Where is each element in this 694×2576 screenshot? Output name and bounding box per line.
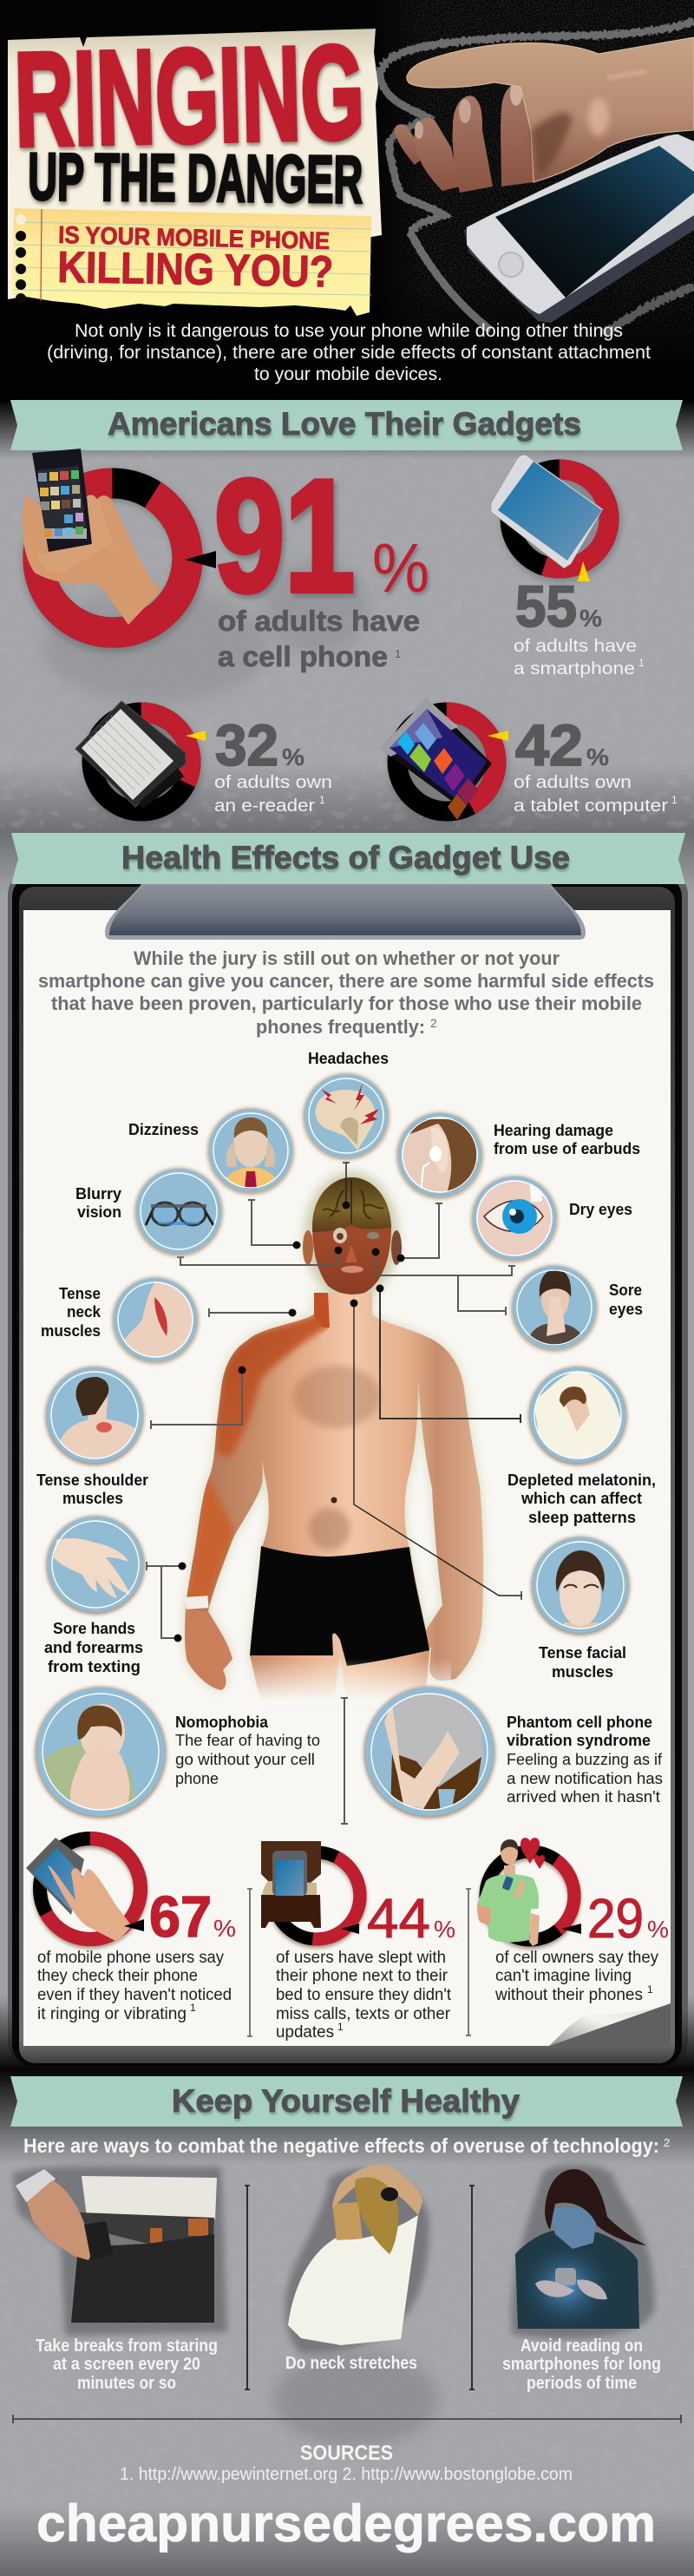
icon: phone on bed: [261, 1841, 321, 1928]
intro text: [47, 321, 651, 384]
label: sore eyes: Sore: [609, 1281, 642, 1299]
symptom: nomophobia: [35, 1687, 167, 1819]
pointer arrow: [124, 1919, 144, 1931]
healthy intro text: 2: [664, 2136, 670, 2149]
divider: [466, 1889, 471, 2035]
label: depleted melatonin: [507, 1472, 656, 1526]
banner: Americans Love Their Gadgets: [10, 400, 683, 450]
sources: 1. http://www.pewinternet.org 2. http://www.bostonglobe.com: [120, 2465, 573, 2484]
label: phantom vibration: a new notification has: [507, 1770, 663, 1787]
head: [303, 1177, 402, 1295]
illustration: lifeless hand: [394, 37, 694, 193]
stat: 32% e-reader: [75, 701, 332, 816]
symptom: headaches: [303, 1073, 390, 1160]
label 55: [514, 637, 645, 678]
photo: woman reading smartphone: [511, 2164, 655, 2339]
label: sore hands: [44, 1620, 143, 1675]
banner: Keep Yourself Healthy: [10, 2076, 683, 2127]
label 67: even if they haven't noticed: [37, 1986, 232, 2004]
label: tense shoulder muscles: muscles: [62, 1490, 123, 1507]
symptom: sore hands and forearms: [46, 1516, 145, 1615]
label 67: it ringing or vibrating: [37, 2005, 187, 2023]
label 67: of mobile phone users say: [37, 1949, 224, 1967]
icon: man with hearts: [477, 1838, 545, 1946]
chest hair: [293, 1366, 380, 1428]
health intro text: 2: [430, 1016, 437, 1030]
label 67: 1: [190, 2002, 196, 2014]
pointer arrow: [488, 731, 508, 741]
number 44: 44: [367, 1887, 430, 1950]
donut 29: [486, 1852, 574, 1943]
sources: SOURCES: [300, 2442, 393, 2465]
pointer arrow: [185, 551, 216, 568]
stat: 29%: [477, 1838, 669, 2004]
health intro text: phones frequently:: [256, 1016, 425, 1038]
symptom: tense facial muscles: [531, 1537, 630, 1635]
symptom: tense neck muscles: [112, 1277, 199, 1364]
label: depleted melatonin: which can affect: [520, 1490, 642, 1507]
divider: [469, 2186, 475, 2389]
number 29: 29: [587, 1887, 644, 1950]
label 29: [494, 1949, 658, 2004]
banner: Health Effects of Gadget Use: Health Effects of Gadget Use: [121, 840, 570, 875]
label 55: 1: [638, 657, 645, 669]
label: sore hands: and forearms: [44, 1639, 143, 1656]
subtitle: IS YOUR MOBILE PHONE: [58, 221, 330, 254]
tablet frame panel: [8, 868, 688, 2068]
label 29: of cell owners say they: [495, 1949, 658, 1967]
percent sign: %: [434, 1916, 455, 1943]
captions: smartphones for long: [502, 2355, 661, 2374]
pointer arrow: [578, 561, 590, 581]
label 44: 1: [337, 2021, 344, 2033]
clipboard clip: [105, 884, 586, 940]
label: blurry vision: vision: [77, 1203, 121, 1221]
stat: 91% cell phone: [23, 446, 429, 672]
label: dizziness: Dizziness: [128, 1121, 199, 1138]
icon: android smartphone: [491, 455, 603, 568]
paper sheet: [8, 29, 382, 299]
number 55: 55: [515, 574, 577, 639]
label 32: of adults own: [214, 773, 332, 792]
label: headaches: Headaches: [308, 1050, 389, 1067]
number 32: 32: [215, 713, 278, 778]
label 55: a smartphone: [514, 659, 635, 678]
intro text: to your mobile devices.: [254, 364, 442, 384]
donut 55: [510, 469, 611, 572]
percent sign: %: [586, 744, 609, 770]
symptom: dry eyes: [471, 1176, 558, 1262]
captions: at a screen every 20: [53, 2355, 200, 2374]
label 42: 1: [671, 794, 678, 806]
subtitle: killing you: KILLING YOU?: [57, 242, 334, 297]
label: tense shoulder muscles: [36, 1472, 148, 1507]
sources: [120, 2442, 573, 2484]
percent sign: %: [647, 1916, 669, 1943]
label: phantom vibration: Feeling a buzzing as if: [507, 1751, 663, 1768]
label 29: 1: [647, 1983, 653, 1996]
banner: Americans Love Their Gadgets: Americans Love Their Gadgets: [108, 406, 581, 442]
divider: [245, 2186, 250, 2389]
label: sore hands: Sore hands: [53, 1620, 135, 1637]
label: depleted melatonin: Depleted melatonin,: [507, 1472, 656, 1489]
label: blurry vision: [75, 1185, 121, 1221]
label 44: bed to ensure they didn't: [276, 1986, 452, 2004]
banner: Health Effects of Gadget Use: [11, 833, 685, 884]
connector lines and dots: [147, 1163, 521, 1824]
stat: 55% smartphone: [491, 455, 645, 678]
number 42: 42: [515, 713, 583, 778]
healthy intro text: Here are ways to combat the negative effects of overuse of technology:: [23, 2134, 659, 2157]
label: nomophobia: go without your cell: [175, 1751, 315, 1768]
label 67: they check their phone: [37, 1967, 198, 1985]
donut 32: [92, 712, 193, 815]
label: phantom vibration: Phantom cell phone: [507, 1714, 652, 1731]
yellow note paper: [12, 208, 371, 316]
label: tense facial muscles: [539, 1644, 626, 1681]
captions: Avoid reading on: [520, 2337, 643, 2356]
human body figure: [147, 1163, 521, 1824]
label 55: of adults have: [514, 637, 637, 656]
stat: 42% tablet: [380, 698, 678, 820]
label: hearing damage: [494, 1122, 640, 1157]
label 44: of users have slept with: [276, 1949, 446, 1967]
donut 42: [397, 712, 498, 815]
captions: [36, 2337, 661, 2393]
percent sign: %: [213, 1915, 236, 1942]
website footer: cheapnursedegrees.com: [36, 2494, 656, 2553]
label 42: a tablet computer: [514, 796, 668, 816]
label: tense neck muscles: [41, 1285, 101, 1340]
intro text: (driving, for instance), there are other side effects of constant attachment: [47, 343, 651, 363]
label: tense neck muscles: muscles: [41, 1322, 101, 1340]
banner: Keep Yourself Healthy: Keep Yourself Healthy: [172, 2083, 520, 2119]
health intro text: that have been proven, particularly for those who use their mobile: [51, 993, 642, 1014]
label: nomophobia: [175, 1714, 320, 1787]
number 91: 91: [214, 446, 355, 625]
label: hearing damage: from use of earbuds: [494, 1140, 640, 1157]
illustration: smartphone on the ground: [464, 134, 694, 323]
percent sign: %: [282, 744, 304, 770]
captions: minutes or so: [77, 2374, 176, 2393]
health intro text: smartphone can give you cancer, there are some harmful side effects: [38, 970, 654, 992]
icon: e-reader: [75, 701, 186, 809]
title: Ringing: RINGING: [13, 17, 366, 174]
label 91: a cell phone: [218, 640, 388, 672]
label: tense shoulder muscles: Tense shoulder: [36, 1472, 148, 1489]
label: tense neck muscles: neck: [67, 1303, 101, 1321]
symptom: phantom vibration: [363, 1687, 495, 1819]
exposed muscles: [185, 1293, 334, 1690]
photo: man checking phone in pocket: [13, 2166, 227, 2336]
label 67: [37, 1949, 232, 2023]
torn paper title panel: [8, 17, 382, 299]
symptom: blurry vision: [134, 1168, 223, 1256]
label: tense facial muscles: Tense facial: [539, 1644, 626, 1662]
label 42: of adults own: [514, 773, 632, 792]
symptom: hearing damage: [396, 1112, 486, 1199]
captions: Take breaks from staring: [36, 2337, 218, 2356]
punched holes: [16, 214, 26, 304]
label: depleted melatonin: sleep patterns: [528, 1509, 636, 1526]
label: sore eyes: [609, 1281, 643, 1318]
skin: [185, 1293, 483, 1701]
percent sign: %: [579, 605, 602, 632]
number 67: 67: [149, 1884, 212, 1950]
captions: Do neck stretches: [285, 2354, 417, 2373]
icon: hand holding phone: [23, 449, 161, 625]
label: nomophobia: phone: [175, 1770, 219, 1787]
captions: periods of time: [527, 2374, 637, 2393]
icon: finger on touchscreen: [26, 1838, 132, 1942]
label 44: miss calls, texts or other: [276, 2005, 451, 2023]
stat: 44%: [261, 1841, 455, 2042]
title: up the danger: UP THE DANGER: [28, 140, 363, 217]
donut 91: [38, 483, 189, 637]
label: phantom vibration: [507, 1714, 663, 1806]
shorts: [250, 1546, 429, 1666]
donut 44: [273, 1852, 360, 1942]
label: blurry vision: Blurry: [75, 1185, 121, 1203]
symptom: tense shoulder muscles: [45, 1367, 144, 1465]
photo: girl stretching neck: [285, 2165, 429, 2353]
label 42: [514, 773, 678, 816]
pointer arrow: [561, 1924, 581, 1934]
label 91: of adults have: [218, 605, 420, 637]
percent sign: %: [372, 529, 429, 606]
label: dry eyes: Dry eyes: [569, 1201, 632, 1218]
label 29: can't imagine living: [495, 1967, 632, 1985]
divider: [247, 1889, 252, 2036]
intro text: Not only is it dangerous to use your phone while doing other things: [75, 321, 623, 341]
label 32: an e-reader: [214, 796, 315, 816]
label: sore eyes: eyes: [609, 1301, 643, 1318]
chalk outline on asphalt: [373, 0, 694, 373]
label: phantom vibration: vibration syndrome: [507, 1732, 651, 1749]
label 29: without their phones: [494, 1986, 643, 2004]
section rule: [13, 2415, 681, 2423]
pointer arrow: [186, 731, 206, 741]
label 32: 1: [319, 794, 325, 806]
donut 67: [40, 1839, 141, 1942]
label 44: [276, 1949, 452, 2042]
label 44: their phone next to their: [276, 1967, 448, 1985]
label: phantom vibration: arrived when it hasn't: [507, 1788, 660, 1806]
label: tense neck muscles: Tense: [59, 1285, 101, 1302]
label: sore hands: from texting: [48, 1658, 141, 1675]
label: hearing damage: Hearing damage: [494, 1122, 613, 1139]
label 32: [214, 773, 332, 816]
label: tense facial muscles: muscles: [552, 1663, 613, 1681]
symptom: sore eyes: [511, 1265, 598, 1352]
label: nomophobia: The fear of having to: [175, 1732, 320, 1749]
label 44: updates: [276, 2023, 334, 2042]
health intro text: [38, 947, 654, 1038]
icon: tablet computer: [380, 698, 492, 820]
label 91: 1: [395, 647, 401, 660]
page curl: [549, 2003, 671, 2046]
stat: 67%: [26, 1838, 236, 2023]
paper sheet: [23, 910, 671, 2046]
symptom: depleted melatonin: [528, 1367, 627, 1465]
label: nomophobia: Nomophobia: [175, 1714, 269, 1731]
label 91: [218, 605, 420, 672]
pointer arrow: [341, 1924, 359, 1934]
health intro text: While the jury is still out on whether or not your: [134, 947, 560, 969]
symptom: dizziness: [207, 1108, 294, 1195]
